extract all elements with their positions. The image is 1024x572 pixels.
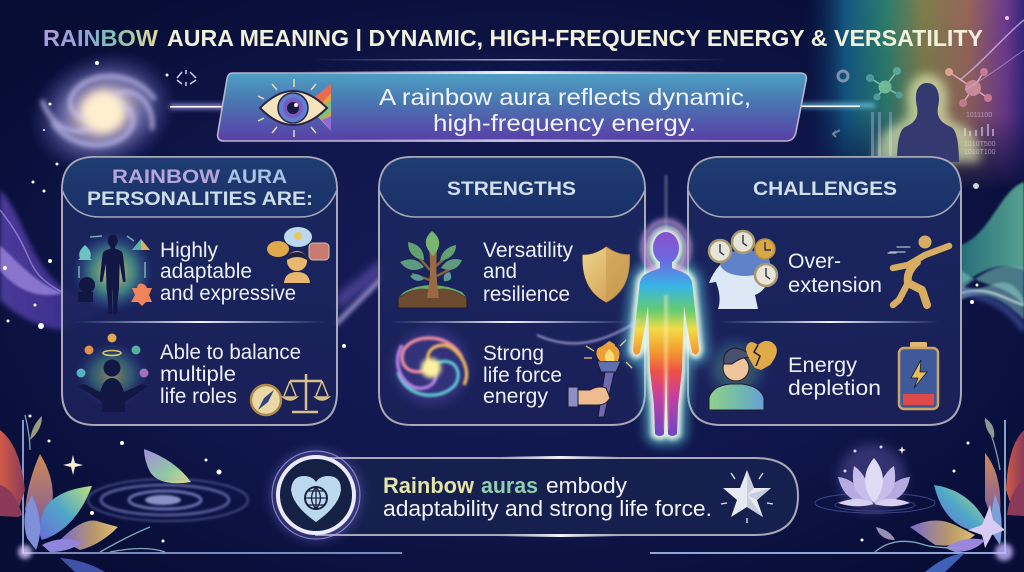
panel header (688, 157, 961, 217)
title: AURA MEANING | DYNAMIC, HIGH-FREQUENCY ENERGY & VERSATILITY (167, 25, 983, 51)
icon: shield (582, 246, 630, 303)
panel header (379, 157, 645, 217)
icon: lotus on water (815, 444, 935, 513)
text: versatility and resilience (483, 239, 573, 306)
frame corners (18, 420, 1013, 561)
icon: heart with globe (270, 449, 362, 541)
icon: compass (251, 385, 281, 415)
panel header: AURA (227, 166, 287, 188)
callout: conclusion pill (270, 449, 798, 541)
panel header: CHALLENGES (753, 178, 897, 200)
icon: expressive person with bubbles (267, 227, 329, 283)
callout text (383, 473, 712, 521)
text: energy depletion: depletion (788, 377, 881, 400)
panel header (62, 157, 337, 217)
text: over-extension: Over- (788, 250, 841, 273)
text: highly adaptable and expressive: adaptable (160, 260, 252, 283)
silhouette with aura, top right (876, 74, 980, 162)
molecules and data decorations: 1011100 (966, 112, 992, 119)
text: able to balance multiple life roles: Able to balance (160, 341, 301, 364)
icon: star (721, 470, 773, 523)
icon: adaptive person cycle (73, 232, 153, 314)
text: energy depletion (788, 354, 881, 400)
text: highly adaptable and expressive (160, 239, 296, 305)
icon: juggler (76, 334, 148, 412)
icon: floating leaf (144, 449, 191, 483)
text: over-extension: extension (788, 274, 882, 297)
right teal wisps (961, 182, 1024, 330)
text: versatility and resilience: Versatility (483, 239, 573, 262)
text: able to balance multiple life roles: life roles (160, 385, 237, 408)
text: strong life force energy (483, 342, 562, 408)
molecules and data decorations: 1010T100 (964, 149, 996, 156)
text: over-extension (788, 250, 882, 297)
icon: eye with rainbow (258, 79, 331, 137)
text: able to balance multiple life roles: multiple (160, 363, 236, 386)
callout text: Rainbow (383, 473, 474, 498)
text: versatility and resilience: and (483, 260, 517, 283)
banner text: A rainbow aura reflects dynamic, (379, 84, 751, 110)
banner text (379, 84, 751, 136)
text: energy depletion: Energy (788, 354, 858, 377)
text: able to balance multiple life roles (160, 341, 301, 408)
text: strong life force energy: Strong (483, 342, 544, 365)
panel header: RAINBOW (112, 166, 221, 188)
text: strong life force energy: life force (483, 364, 562, 387)
rainbow aura human figure (537, 175, 699, 436)
molecules and data decorations (833, 16, 1024, 156)
callout text: auras (481, 473, 538, 498)
icon: rainbow spiral galaxy (393, 329, 469, 405)
stars (3, 162, 979, 542)
text: versatility and resilience: resilience (483, 283, 570, 306)
icon: tired person with broken heart (700, 332, 777, 410)
icon: balance scales (283, 374, 329, 412)
left purple wisps (0, 190, 382, 330)
panel header: STRENGTHS (447, 178, 576, 200)
icon: low battery (899, 342, 938, 409)
panel: challenges (688, 157, 961, 425)
icon: tree (398, 231, 467, 308)
callout text: embody (546, 473, 628, 498)
text: strong life force energy: energy (483, 385, 548, 408)
right corner leaves (875, 418, 1024, 572)
banner light streaks (170, 59, 875, 109)
text: highly adaptable and expressive: and expressive (160, 282, 296, 305)
banner text: high-frequency energy. (433, 110, 696, 136)
icon: spiral galaxy (11, 30, 196, 194)
banner (218, 71, 806, 142)
text: highly adaptable and expressive: Highly (160, 239, 218, 262)
left corner leaves (0, 415, 165, 572)
title: RAINBOW (43, 25, 158, 51)
panel: strengths (379, 157, 645, 425)
icon: head with clocks (709, 231, 777, 309)
icon: water ripples (88, 479, 248, 521)
panel header: PERSONALITIES ARE: (87, 188, 313, 210)
panel: rainbow aura personalities (62, 157, 337, 425)
icon: torch in hand (568, 340, 632, 417)
molecules and data decorations: 1010T500 (964, 141, 996, 148)
icon: running figure (888, 236, 949, 305)
callout text: adaptability and strong life force. (383, 496, 712, 521)
